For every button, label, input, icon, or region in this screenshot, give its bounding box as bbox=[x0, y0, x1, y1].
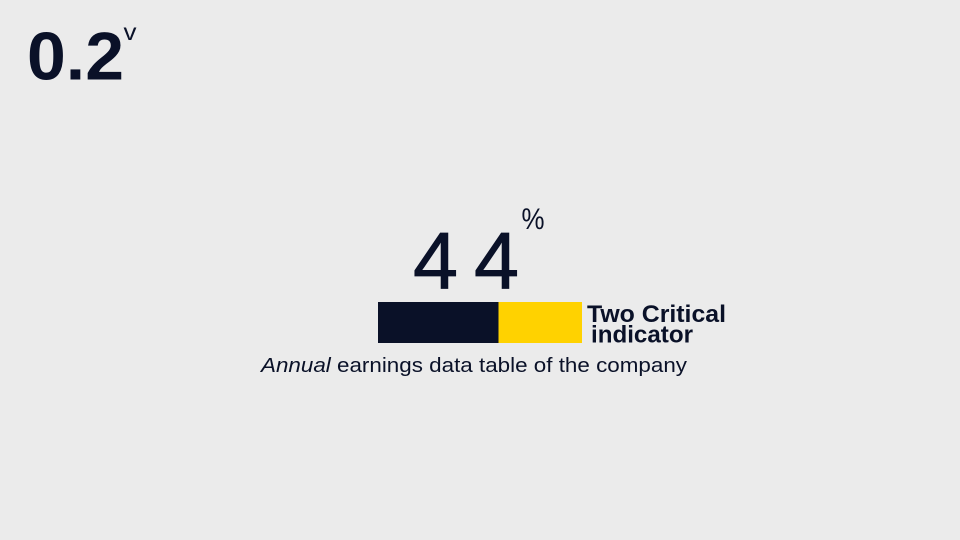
value: 0.2: 0.2 bbox=[27, 18, 124, 94]
caption: Annual earnings data table of the company bbox=[259, 354, 688, 377]
progress bar bbox=[378, 302, 582, 343]
bar: yellow segment bbox=[498, 302, 582, 343]
percent sign: % bbox=[522, 203, 544, 236]
indicator label bbox=[587, 301, 726, 348]
value: 44: 44 bbox=[413, 216, 519, 306]
big percentage figure bbox=[413, 203, 544, 306]
label line 2: indicator bbox=[591, 322, 693, 348]
unit: v: v bbox=[124, 19, 137, 45]
bar: navy segment bbox=[378, 302, 498, 343]
version number bbox=[27, 18, 137, 94]
label line 1: Two Critical bbox=[587, 301, 726, 328]
